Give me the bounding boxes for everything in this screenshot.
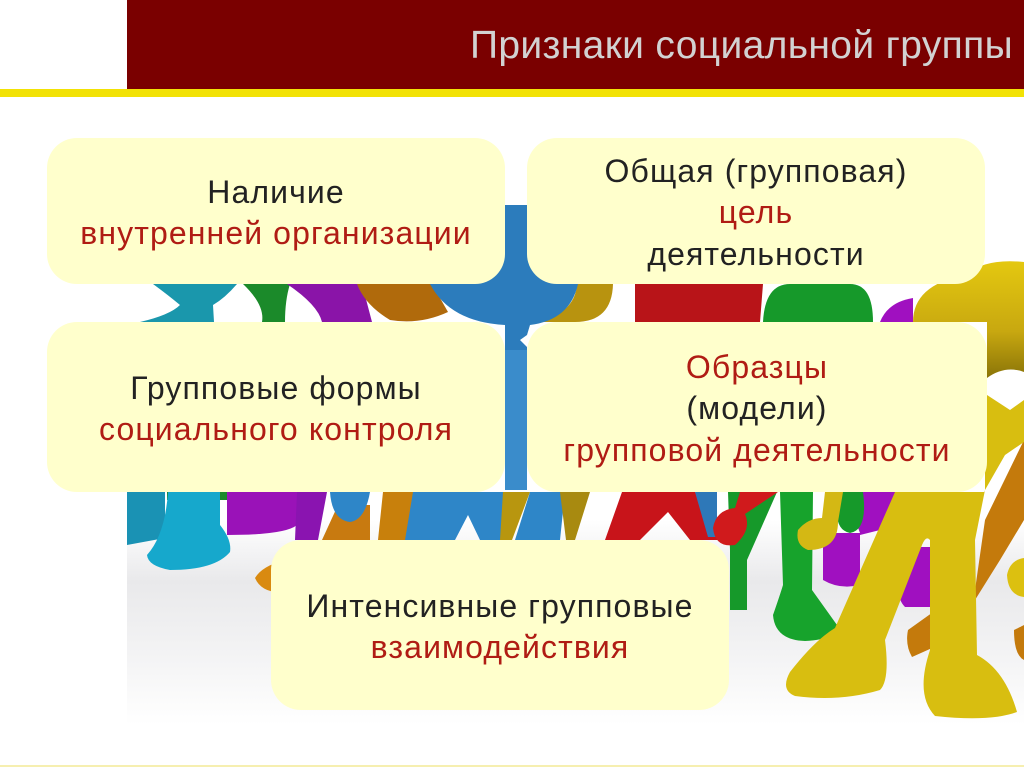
card: social control: социального контроля (99, 411, 453, 447)
card: models of activity (527, 322, 987, 492)
card: common goal: деятельности (647, 236, 865, 272)
lower band left (127, 492, 165, 545)
card: common goal (527, 138, 985, 284)
orange figure (907, 440, 1024, 657)
card: internal organisation: Наличие (207, 174, 345, 210)
card: social control: Групповые формы (130, 370, 422, 406)
card: models of activity: Образцы (686, 349, 828, 385)
card: internal organisation: внутренней организации (80, 215, 472, 251)
header bar (127, 0, 1024, 89)
lower band right (605, 492, 722, 540)
bottom rule (0, 765, 1024, 767)
card: intensive interactions: взаимодействия (371, 629, 629, 665)
card: common goal: цель (719, 194, 793, 230)
card: internal organisation (47, 138, 505, 284)
card: models of activity: (модели) (686, 390, 828, 426)
card: models of activity: групповой деятельности (563, 432, 951, 468)
upper band: heads and bodies (140, 284, 237, 322)
yellow rule (0, 89, 1024, 97)
card: common goal: Общая (групповая) (605, 153, 907, 189)
title: Признаки социальной группы (470, 24, 1013, 67)
card: intensive interactions (271, 540, 729, 710)
card: intensive interactions: Интенсивные групповые (306, 588, 694, 624)
floor shadow (127, 520, 1024, 725)
yellow figure (913, 261, 1024, 378)
card: social control (47, 322, 505, 492)
